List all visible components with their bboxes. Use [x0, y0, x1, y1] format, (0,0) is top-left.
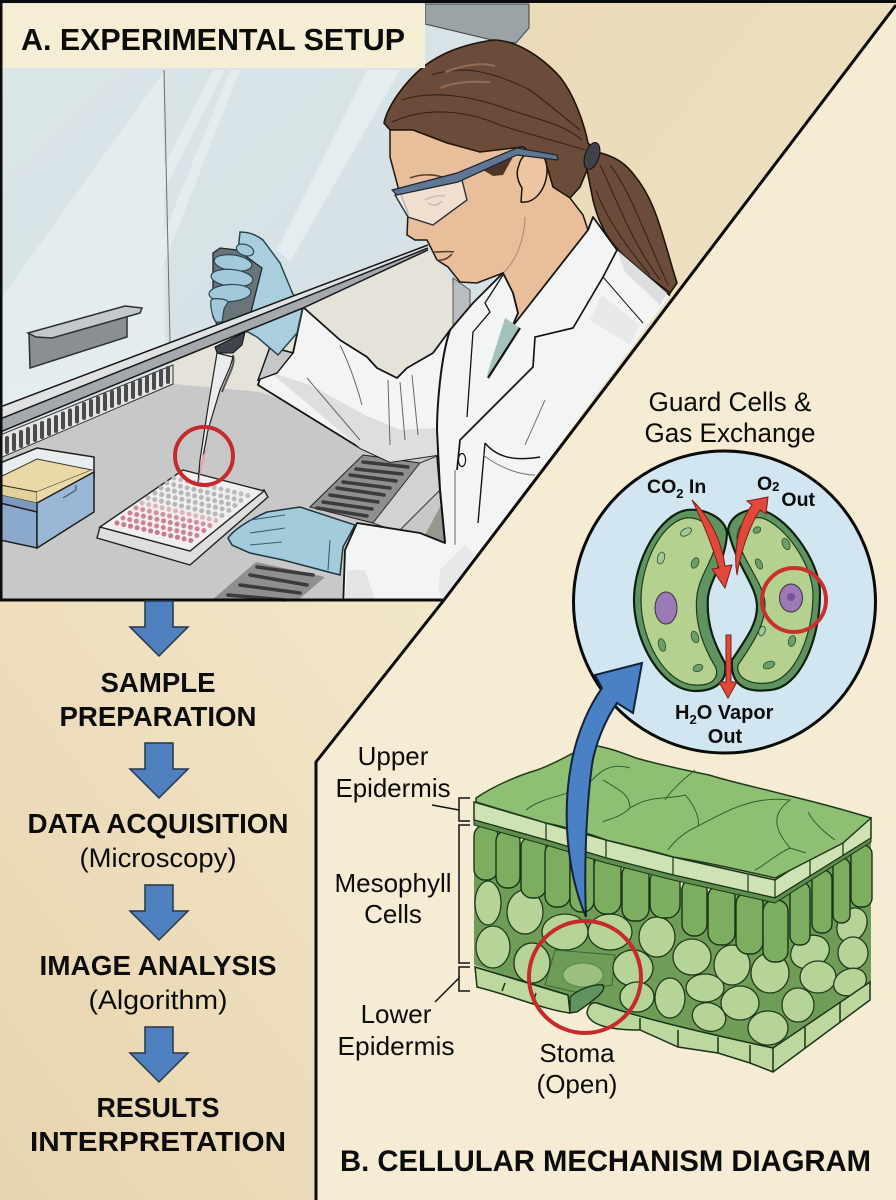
spongy mesophyll cells [475, 881, 873, 1045]
step: data acquisition: DATA ACQUISITION [28, 808, 288, 839]
ceiling fixture [425, 4, 529, 43]
panel: workflow background [0, 600, 444, 1200]
upper epidermis band [474, 802, 871, 903]
highlight circle on pipette tip [175, 427, 233, 485]
back wall of cabinet [173, 250, 470, 450]
label: upper epidermis: Upper [358, 741, 429, 771]
label: lower epidermis [338, 999, 454, 1061]
step: interpretation: INTERPRETATION [30, 1126, 286, 1157]
heading: guard cells: Gas Exchange [644, 418, 816, 448]
arrow 4 [130, 1027, 188, 1082]
hair tie [584, 142, 600, 170]
label: out: Out [708, 726, 743, 748]
scientist [256, 39, 678, 598]
step: results: RESULTS [96, 1092, 220, 1123]
label: stoma open [537, 1038, 617, 1099]
panel: experimental setup [0, 0, 700, 640]
pipette tip [198, 353, 233, 483]
arrow 2 [130, 743, 188, 798]
lower epidermis [475, 967, 870, 1072]
arrow: carbon dioxide in [692, 500, 732, 588]
coat cuff opening [258, 347, 293, 380]
label: lower epidermis: Epidermis [338, 1031, 454, 1061]
label: mesophyll cells [334, 868, 452, 929]
title: cellular mechanism diagram: B. CELLULAR MECHANISM DIAGRAM [340, 1145, 871, 1178]
floor vents [212, 455, 445, 600]
hair under strap [483, 157, 513, 176]
label: upper epidermis: Epidermis [336, 773, 450, 803]
sash rail [0, 245, 428, 432]
label: water vapour: 2 [689, 712, 697, 727]
goggles [392, 148, 558, 225]
label: water vapour: O Vapor [697, 702, 774, 724]
lab coat [257, 216, 670, 598]
label: mesophyll cells: Mesophyll [334, 868, 452, 898]
inset circle [574, 451, 876, 753]
leaf top surface [476, 745, 871, 878]
panel: guard cell inset [574, 451, 876, 753]
bracket: mesophyll [459, 825, 470, 963]
biosafety cabinet glass [0, 0, 529, 480]
label: carbon dioxide in: In [683, 476, 706, 498]
coat shadows [270, 250, 667, 610]
heading: guard cells [644, 387, 816, 448]
label: upper epidermis [336, 741, 450, 803]
arrow 3 [130, 885, 188, 940]
arrow: oxygen out [736, 497, 768, 575]
eye, brow and mouth [410, 175, 454, 260]
glove back [230, 232, 302, 355]
glass reflections [0, 70, 400, 410]
upper gloved hand with pipette [198, 232, 302, 483]
work surface [2, 384, 440, 598]
leaf surface veins [526, 766, 835, 870]
label: oxygen out: O [757, 473, 772, 495]
label: stoma open: (Open) [537, 1069, 617, 1099]
step: image analysis: IMAGE ANALYSIS [40, 950, 276, 981]
pipette handle [213, 248, 262, 330]
highlight circle on stoma [529, 921, 641, 1033]
panel: workflow [28, 601, 288, 1157]
right guard cell [728, 510, 820, 691]
stomatal cavity [545, 950, 615, 992]
label: stoma open: Stoma [539, 1038, 615, 1068]
step note: algorithm: (Algorithm) [88, 985, 228, 1015]
ear [517, 152, 547, 202]
label: oxygen out: 2 [772, 479, 779, 494]
well plate [97, 470, 268, 565]
rear grille [0, 365, 173, 458]
chart: leaf cross section [474, 663, 873, 1072]
title: experimental setup: A. EXPERIMENTAL SETUP [21, 22, 405, 57]
arrow 1 [130, 601, 188, 656]
hair strands [392, 70, 668, 285]
step note: microscopy: (Microscopy) [80, 843, 236, 873]
highlight circle on nucleus [762, 568, 826, 632]
leaf interior [474, 840, 871, 1052]
undershirt [487, 318, 520, 378]
coat details [307, 250, 643, 545]
label: carbon dioxide in: 2 [676, 486, 683, 501]
face and neck [390, 130, 588, 327]
step label second line: PREPARATION [60, 701, 256, 732]
heading box [0, 4, 425, 68]
step: sample preparation: SAMPLE [100, 667, 216, 698]
bracket: lower epidermis [435, 967, 470, 1002]
palisade cells [474, 825, 872, 962]
pipette lower body [215, 332, 245, 353]
blue arrow to inset [567, 663, 642, 917]
jaw shading [503, 217, 525, 273]
fingers [209, 242, 255, 322]
ponytail and hair [384, 40, 677, 293]
cells bordering the stoma [514, 943, 654, 1012]
sash handle [28, 306, 142, 368]
label: oxygen out: Out [781, 489, 815, 511]
guard cell of stoma [570, 985, 604, 1013]
panel: top right tan corner [430, 0, 896, 600]
label: lower epidermis: Lower [361, 999, 432, 1029]
label: water vapour: H [675, 702, 689, 724]
icon: tip box [0, 448, 94, 548]
lower gloved hand [228, 507, 355, 575]
label: mesophyll cells: Cells [364, 899, 422, 929]
label: carbon dioxide in: CO [647, 476, 676, 498]
arrow: water vapour out [719, 635, 737, 698]
heading: guard cells: Guard Cells & [648, 387, 812, 417]
bracket: upper epidermis [432, 798, 470, 821]
left guard cell [634, 510, 727, 691]
